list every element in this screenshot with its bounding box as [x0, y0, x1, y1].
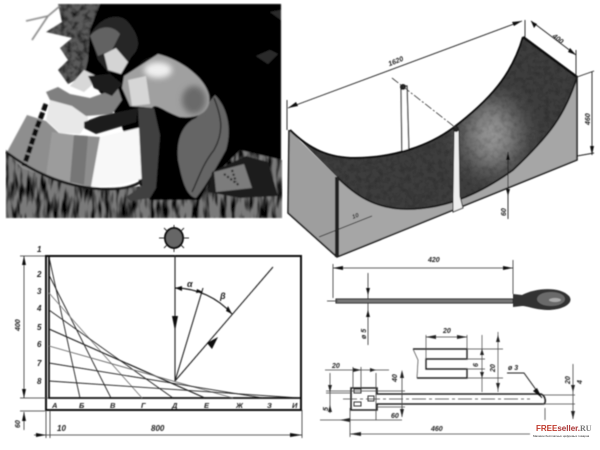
left side wall — [288, 130, 337, 257]
row numbers: 2 — [36, 270, 42, 279]
box front wall — [288, 77, 577, 257]
logo text: FREEseller.RU — [536, 424, 592, 433]
reflector lower edge — [6, 152, 143, 189]
fork dimensions — [426, 332, 503, 392]
boy shirt — [122, 54, 209, 117]
foliage — [46, 4, 100, 84]
front strut — [453, 130, 463, 212]
rod with handle drawing — [327, 257, 570, 345]
column letters: Ж — [235, 401, 244, 410]
trough upper edge — [290, 37, 523, 158]
strut plan drawing: 4 — [577, 380, 584, 385]
solar reflector 3D drawing — [285, 20, 594, 257]
fork end detail drawing: 6 — [473, 363, 480, 367]
boy foot and shoe — [208, 156, 278, 198]
angle arc — [175, 288, 232, 314]
strut plan drawing: 20 — [331, 363, 340, 370]
row numbers: 1 — [37, 245, 42, 254]
strut plan drawing: 460 — [430, 426, 443, 433]
photo dark background — [84, 4, 281, 218]
handle — [513, 289, 570, 310]
column letters: А — [51, 401, 57, 410]
column letters: Д — [171, 401, 178, 410]
column letters: В — [110, 401, 116, 410]
trough surface — [301, 38, 576, 209]
solar reflector 3D drawing: 400 — [550, 32, 564, 46]
strut plan drawing: 20 — [565, 376, 572, 385]
dimension labels: 1620 — [388, 56, 405, 68]
box outline — [288, 77, 577, 257]
strut plan drawing: 60 — [391, 413, 399, 420]
strut plan drawing: 5 — [323, 407, 330, 411]
boy leg — [178, 95, 229, 198]
strut plan drawing: 40 — [392, 374, 399, 383]
sun icon — [159, 225, 189, 252]
reflection diagram: β — [219, 291, 226, 301]
dimension arrows — [288, 21, 594, 196]
photo: boy bending a reflector — [5, 4, 283, 220]
rod with handle drawing: ø 5 — [361, 329, 368, 339]
fork end detail drawing — [413, 328, 503, 392]
row numbers: 7 — [37, 359, 42, 368]
dimension lines — [287, 20, 594, 237]
reflector sheet striped — [7, 115, 100, 187]
trough lower edge — [337, 77, 577, 209]
strut dimensions — [320, 364, 575, 437]
reflector handle chain — [24, 104, 46, 166]
fork end detail drawing: 20 — [442, 328, 451, 335]
reflection diagram: 60 — [15, 420, 22, 428]
construction lines — [49, 257, 300, 398]
column letters — [51, 401, 298, 410]
boy arm front — [126, 108, 160, 201]
column letters: Г — [141, 401, 146, 410]
grass ground — [5, 148, 283, 220]
row numbers — [36, 245, 42, 386]
branches — [26, 6, 60, 40]
logo tagline: Магазин бесплатных цифровых товаров — [533, 434, 590, 438]
boy head — [90, 17, 138, 72]
back support strut — [401, 86, 409, 157]
solar reflector 3D drawing: 10 — [352, 213, 361, 221]
reflection diagram: 800 — [151, 424, 165, 433]
fork end detail drawing: 20 — [490, 364, 497, 373]
diagram dimensions — [20, 256, 302, 438]
reflection diagram: 400 — [15, 319, 22, 332]
row numbers: 8 — [37, 377, 42, 386]
diagram frame — [46, 256, 301, 410]
column letters: Б — [79, 401, 85, 410]
strut plan drawing: ø 3 — [508, 365, 518, 372]
reflection diagram: 10 — [57, 424, 66, 433]
reflector upper white — [46, 100, 88, 134]
solar reflector 3D drawing: 60 — [501, 208, 508, 216]
row numbers: 4 — [36, 304, 42, 313]
boy arm back — [46, 87, 122, 116]
leader to hole — [507, 373, 542, 398]
strut slots — [354, 389, 361, 393]
foliage right — [256, 10, 281, 64]
rod with handle drawing: 420 — [427, 257, 440, 264]
white reflector panel — [91, 127, 142, 187]
row numbers: 3 — [37, 287, 42, 296]
axis line — [343, 398, 530, 400]
right top edge — [523, 37, 577, 77]
strut axis line — [392, 78, 456, 128]
strut plan drawing — [320, 363, 584, 437]
solar reflector 3D drawing: 460 — [585, 113, 592, 126]
rod — [336, 299, 513, 303]
column letters: З — [267, 401, 272, 410]
row numbers: 5 — [37, 323, 42, 332]
column letters: И — [292, 401, 298, 410]
row numbers: 6 — [37, 340, 42, 349]
watermark logo — [533, 424, 592, 438]
angle labels: α — [187, 279, 193, 289]
reflection diagram — [15, 245, 302, 438]
rays and arrows — [175, 255, 273, 381]
column letters: Е — [204, 401, 210, 410]
pale gap under the foliage — [70, 70, 100, 92]
